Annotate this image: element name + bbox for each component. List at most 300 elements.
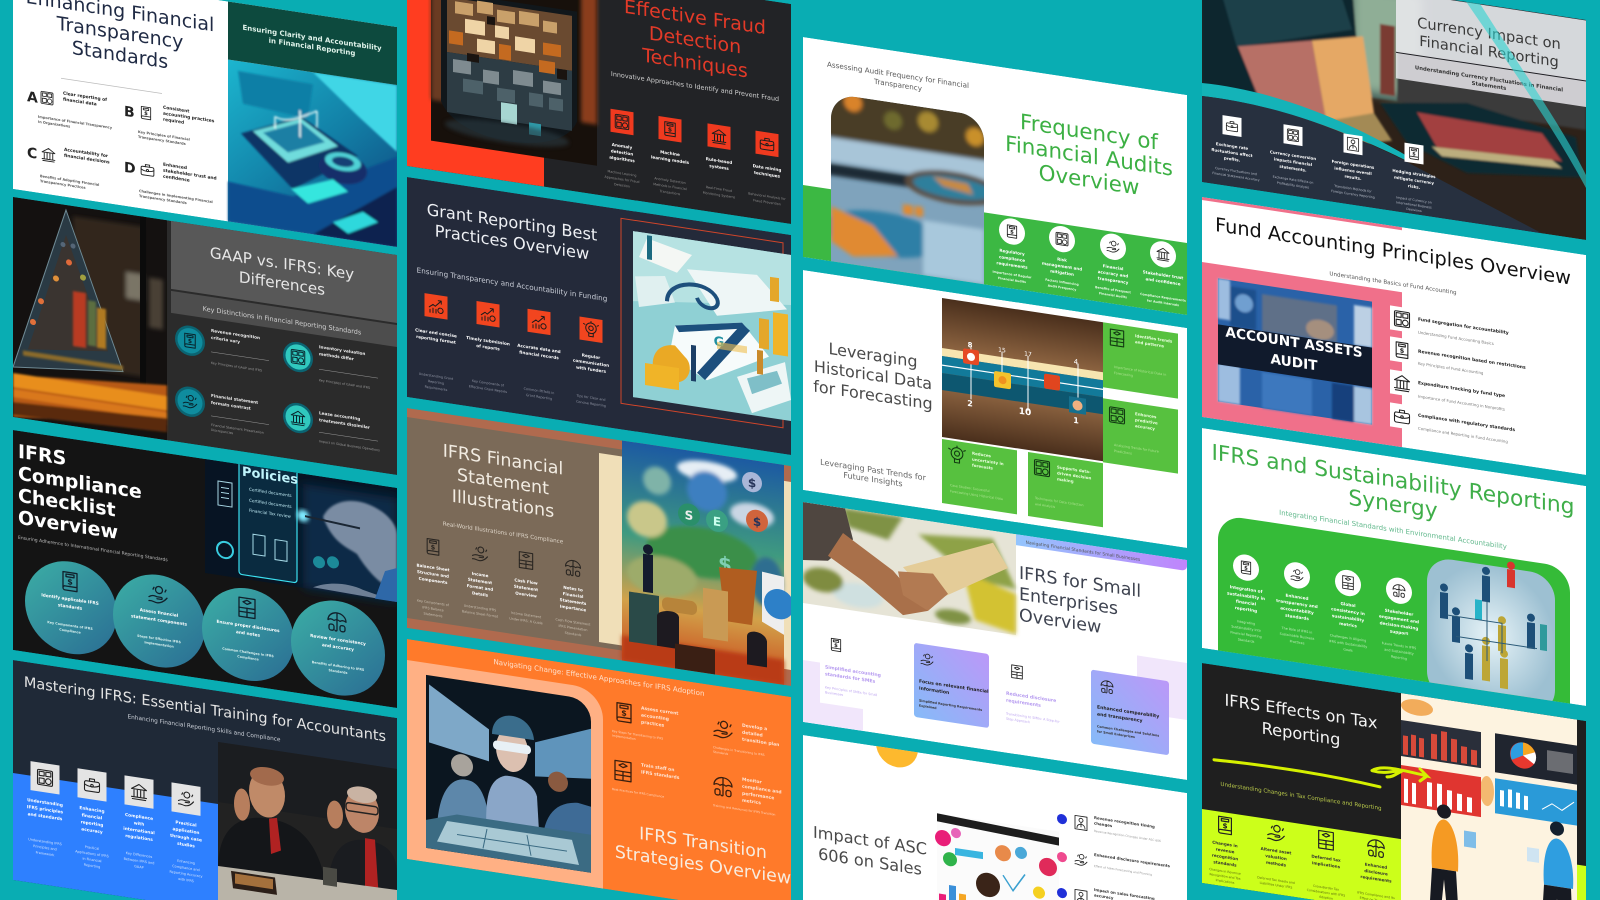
point: financial statement bbox=[175, 386, 269, 434]
title: Techniques bbox=[641, 43, 748, 82]
light panel bbox=[407, 660, 603, 889]
effect 1: Changes in Revenue bbox=[1209, 867, 1241, 876]
driver 2: management and bbox=[1042, 261, 1082, 272]
card 3: requirements bbox=[1006, 698, 1041, 709]
item C bbox=[28, 148, 110, 189]
item D: D bbox=[124, 160, 136, 177]
effect 4: Decisions bbox=[1406, 207, 1422, 213]
subtitle bar bbox=[171, 291, 397, 347]
item A: A bbox=[27, 89, 38, 107]
effect 1: recognition bbox=[1212, 853, 1238, 861]
practice 2: Effective Grant Reports bbox=[469, 384, 507, 394]
step: assess: accounting bbox=[641, 712, 669, 723]
effect 4: mitigate currency bbox=[1394, 175, 1434, 186]
column 4 bbox=[169, 782, 203, 885]
effect 4: Enhanced bbox=[1365, 862, 1387, 870]
item C: Benefits of Adopting Financial bbox=[40, 174, 99, 187]
step: plan: Standards bbox=[713, 750, 729, 756]
driver 3: transparency bbox=[1098, 276, 1129, 285]
illustration 1: IFRS Balance bbox=[422, 605, 444, 613]
pillar 2: accountability bbox=[1280, 605, 1314, 615]
item A: Importance of Financial Transparency bbox=[38, 115, 113, 130]
principle 2: Key Principles of Fund Accounting bbox=[1418, 361, 1484, 376]
step 3: Compliance bbox=[237, 654, 259, 662]
step: assess: Assess current bbox=[641, 705, 679, 717]
column 1: Principles and bbox=[33, 844, 57, 852]
technique 4: Data mining bbox=[753, 163, 781, 173]
blue band bbox=[13, 773, 218, 900]
effect 1 bbox=[1211, 113, 1260, 182]
column 4: Enhancing bbox=[177, 859, 195, 865]
image: painted finance scene bbox=[622, 440, 794, 686]
practice 3 bbox=[517, 307, 561, 402]
card 3 bbox=[1005, 664, 1061, 729]
title box: Understanding Currency Fluctuations in Financial bbox=[1415, 65, 1563, 94]
column 3: with bbox=[134, 820, 144, 828]
step 1 bbox=[25, 561, 115, 654]
effect 1: fluctuations affect bbox=[1211, 147, 1253, 158]
image: policies hologram: Certified documents bbox=[249, 498, 292, 509]
title: IFRS and Sustainability Reporting bbox=[1211, 441, 1575, 520]
image: painted finance scene: $ bbox=[718, 551, 732, 577]
technique 2 bbox=[651, 115, 690, 198]
pillar 4: engagement and bbox=[1379, 613, 1419, 624]
title: IFRS Effects on Tax bbox=[1225, 690, 1378, 733]
brown panel bbox=[407, 417, 622, 650]
effect 2: impacts financial bbox=[1274, 156, 1313, 167]
practice 2: of reports bbox=[476, 343, 500, 352]
item B: B bbox=[124, 104, 135, 121]
column 4: through case bbox=[170, 833, 202, 844]
illustration 2: Income bbox=[472, 571, 489, 578]
effect 1: Implications bbox=[1216, 878, 1235, 885]
card 1 bbox=[820, 629, 895, 714]
title: IFRS for Small bbox=[1019, 564, 1141, 602]
principle 3 bbox=[1390, 369, 1505, 412]
item A: in Organizations bbox=[38, 120, 70, 129]
pillar 4: Stakeholder bbox=[1385, 608, 1414, 617]
illustration 1: Balance Sheet bbox=[417, 562, 449, 572]
box: decision making: making bbox=[1057, 476, 1074, 484]
effect 2: Liabilities Under IFRS bbox=[1260, 881, 1292, 890]
practice 2: Timely submission bbox=[466, 335, 510, 347]
pillar 2 bbox=[1276, 559, 1318, 647]
practice 1: Understanding Grant bbox=[419, 372, 454, 381]
practice 1: reporting format bbox=[416, 334, 456, 345]
right lime edge bbox=[1577, 865, 1586, 900]
item B: Transparency Standards bbox=[138, 135, 186, 146]
step: assess bbox=[612, 701, 679, 748]
item C: Transparency Practices bbox=[40, 179, 86, 190]
pillar 3: IFRS with Sustainability bbox=[1329, 639, 1367, 649]
technique 1: algorithms bbox=[609, 155, 635, 163]
step 2: Steps for Effective IFRS bbox=[137, 634, 181, 644]
item D: Enhanced bbox=[163, 162, 187, 171]
point: inventory valuation bbox=[283, 339, 378, 391]
principle 4 bbox=[1390, 402, 1515, 445]
pillar 2: Sustainable Business bbox=[1280, 632, 1315, 641]
panel: GAAP vs. IFRS bbox=[13, 197, 397, 475]
practice 4: communication bbox=[573, 358, 609, 368]
item B: Consistent bbox=[163, 105, 189, 115]
item A: financial data bbox=[63, 97, 97, 108]
row 1: Revenue Recognition Changes Under ASC 606 bbox=[1094, 829, 1161, 843]
practice 1 bbox=[415, 292, 457, 394]
panel: Leveraging Historical Data bbox=[803, 270, 1187, 548]
effect 4: risks. bbox=[1408, 183, 1421, 190]
technique 1: Detection bbox=[614, 182, 630, 189]
practice 3: financial records bbox=[519, 349, 559, 360]
step 4 bbox=[291, 600, 385, 696]
effect 4: requirements bbox=[1360, 874, 1392, 884]
effect 1: Exchange rate bbox=[1216, 141, 1248, 151]
point: lease accounting: Lease accounting bbox=[319, 410, 360, 421]
point: financial statement: Financial statement bbox=[211, 393, 258, 405]
title: Grant Reporting Best bbox=[427, 200, 597, 245]
image: banknote and tablets bbox=[1202, 0, 1586, 191]
illustration 3: Income Statement bbox=[511, 611, 542, 619]
effect 4: disclosure bbox=[1364, 868, 1388, 877]
image: presenter at colourful board bbox=[935, 813, 1059, 900]
ribbon: diagonal bbox=[1464, 0, 1586, 188]
column 2: Practical bbox=[85, 845, 99, 851]
title: IFRS Transition bbox=[639, 824, 767, 863]
column 1: IFRS principles bbox=[27, 804, 63, 816]
subtitle: Ensuring Adherence to International Financial Reporting Standards bbox=[18, 535, 168, 563]
technique 4: Fraud Prevention bbox=[753, 198, 781, 206]
image: timeline on wood bbox=[942, 298, 1103, 461]
pillar 3: metrics bbox=[1339, 621, 1357, 629]
principle 1: Understanding Fund Accounting Basics bbox=[1418, 330, 1494, 346]
driver 4: and confidence bbox=[1146, 276, 1181, 287]
image: account assets audit: ACCOUNT ASSETS bbox=[1225, 325, 1363, 361]
illustration 3: Cash Flow bbox=[514, 577, 538, 586]
pillar 4: Future Trends in IFRS bbox=[1382, 641, 1416, 650]
title: Synergy bbox=[1348, 486, 1438, 524]
ribbon: lower curve bbox=[1202, 83, 1407, 161]
column 4: with IFRS bbox=[178, 877, 194, 883]
point: lease accounting: treatments dissimilar bbox=[319, 417, 371, 430]
practice 3: Grant Reporting bbox=[526, 393, 552, 401]
subtitle band bbox=[228, 1, 397, 85]
driver 1: requirements bbox=[996, 260, 1028, 270]
illustration 1: Statements bbox=[424, 612, 443, 618]
effect 3: Considerations with IFRS bbox=[1307, 888, 1345, 898]
image: timeline on wood: 4 bbox=[1074, 357, 1079, 367]
principle 3: Importance of Fund Accounting in Nonprofits bbox=[1418, 394, 1505, 412]
column 3: Compliance bbox=[125, 812, 153, 822]
box: uncertainty: forecasts bbox=[972, 463, 993, 471]
effect 2: Profitability Analysis bbox=[1277, 181, 1309, 190]
technique 1 bbox=[604, 108, 640, 190]
point: inventory valuation: Inventory valuation bbox=[319, 344, 365, 356]
technique 1: Machine Learning bbox=[607, 169, 637, 178]
panel: IFRS Compliance Checklist bbox=[13, 426, 397, 708]
column 2: financial bbox=[82, 812, 103, 822]
pillar 1: Integrating bbox=[1237, 619, 1255, 626]
step: assess: Implementation bbox=[612, 733, 636, 741]
effect 3: Deferred tax bbox=[1311, 854, 1341, 863]
item D bbox=[125, 162, 216, 204]
step: monitor: metrics bbox=[742, 798, 761, 806]
column 1: and standards bbox=[28, 811, 63, 823]
panel: Grant Reporting bbox=[407, 177, 791, 455]
effect 1: revenue bbox=[1216, 847, 1235, 854]
step 3: Ensure proper disclosures bbox=[216, 619, 280, 634]
column 1 bbox=[27, 761, 63, 859]
box: uncertainty: uncertainty in bbox=[972, 457, 1004, 466]
column 2: reporting bbox=[81, 819, 103, 829]
effect 3 bbox=[1307, 829, 1345, 900]
step 2: Assess financial bbox=[140, 607, 179, 619]
panel: Mastering IFRS bbox=[13, 660, 397, 900]
subtitle: Understanding Changes in Tax Compliance and Reporting bbox=[1220, 782, 1382, 812]
point: financial statement: formats contrast bbox=[211, 400, 251, 411]
item B bbox=[125, 106, 214, 145]
item B: required bbox=[163, 117, 184, 126]
step: plan: detailed bbox=[742, 730, 763, 739]
technique 3: Monitoring Systems bbox=[703, 191, 736, 200]
panel: Currency Impact bbox=[1202, 0, 1586, 240]
effect 3: influence overall bbox=[1334, 165, 1372, 176]
title: Statement bbox=[457, 466, 549, 499]
title: Overview bbox=[1039, 161, 1139, 201]
step: assess: practices bbox=[641, 719, 664, 729]
pillar 3: Global bbox=[1340, 601, 1356, 608]
card 2: information bbox=[919, 686, 949, 696]
title: Impact of ASC bbox=[813, 823, 927, 859]
panel: Fund Accounting Principles bbox=[1202, 197, 1586, 475]
column 3 bbox=[123, 775, 155, 871]
title: Transparency bbox=[56, 12, 183, 54]
panel: IFRS for Small Enterprises bbox=[803, 502, 1187, 780]
title: Overview bbox=[18, 506, 118, 544]
image: policies hologram: Policies bbox=[242, 465, 298, 488]
practice 1: Clear and concise bbox=[415, 327, 457, 339]
subtitle: Transparency bbox=[873, 77, 923, 93]
driver 3: Benefits of Frequent bbox=[1095, 285, 1131, 295]
step: monitor: performance bbox=[742, 791, 774, 801]
title box: Statements bbox=[1472, 81, 1506, 92]
practice 4: Tips for Clear and bbox=[576, 393, 605, 402]
column 2 bbox=[75, 768, 109, 870]
box: uncertainty: Case Studies: Successful bbox=[950, 483, 990, 493]
item D: stakeholder trust and bbox=[163, 168, 217, 182]
column 2: accuracy bbox=[81, 826, 103, 836]
effect 1: Currency Fluctuations and bbox=[1215, 166, 1257, 176]
pink strip bbox=[1202, 197, 1402, 230]
red block bbox=[407, 0, 544, 187]
principle 1: Fund segregation for accountability bbox=[1418, 317, 1509, 336]
illustration 4: IFRS Presentation bbox=[559, 624, 587, 632]
row 2: Effect of Sales Forecasting and Planning bbox=[1094, 864, 1152, 877]
card 3: Transitioning to SMEs: A Step-by- bbox=[1005, 712, 1061, 724]
column 3: regulations bbox=[125, 833, 153, 843]
title: Financial Audits bbox=[1005, 132, 1173, 182]
practice 1: Requirements bbox=[425, 385, 448, 392]
driver 2: Audit Frequency bbox=[1048, 283, 1076, 292]
image: teal isometric scales bbox=[228, 59, 397, 247]
lime band bbox=[1202, 809, 1586, 900]
pillar 1: Standards bbox=[1238, 637, 1255, 644]
title box bbox=[1396, 0, 1586, 107]
effect 3: results. bbox=[1344, 174, 1362, 181]
image: glass pyramid bbox=[13, 197, 167, 440]
principle 2: Revenue recognition based on restrictions bbox=[1418, 349, 1526, 371]
effect 2: valuation bbox=[1265, 853, 1287, 861]
item A: Clear reporting of bbox=[63, 91, 107, 103]
image: policies hologram bbox=[205, 455, 397, 602]
item D: Challenges in Implementing Financial bbox=[139, 189, 213, 204]
image: timeline on wood: 2 bbox=[967, 399, 973, 409]
item C: C bbox=[27, 145, 37, 163]
point: revenue recognition: criteria vary bbox=[211, 335, 240, 344]
driver 4: Stakeholder trust bbox=[1143, 269, 1183, 280]
box: accuracy: Predictions bbox=[1114, 449, 1132, 456]
pillar 4 bbox=[1379, 575, 1419, 663]
title bar: Differences bbox=[239, 268, 325, 299]
image: handshake over map bbox=[803, 502, 1016, 635]
pillar 2: transparency and bbox=[1276, 598, 1318, 609]
illustration 2: Details bbox=[472, 590, 489, 598]
box: accuracy: Enhances bbox=[1135, 411, 1157, 419]
pillar 2: Practices bbox=[1290, 639, 1305, 645]
pillar 1: Sustainability into bbox=[1231, 624, 1261, 633]
effect 3: Foreign Currency Reporting bbox=[1331, 189, 1375, 200]
row 2: Enhanced disclosure requirements bbox=[1094, 852, 1171, 869]
effect 4: IFRS Compliance and Its bbox=[1357, 890, 1395, 900]
principle 4: Compliance and Reporting in Fund Accounting bbox=[1418, 426, 1508, 444]
technique 2: Anomaly Detection bbox=[654, 176, 686, 185]
column 4: Compliance and bbox=[172, 864, 200, 872]
card 4: Common Challenges and Solutions bbox=[1097, 724, 1159, 738]
effect 3: Foreign operations bbox=[1332, 159, 1375, 170]
pillar 4: support bbox=[1390, 628, 1408, 636]
step: train: IFRS standards bbox=[641, 769, 680, 781]
title: Checklist bbox=[18, 484, 116, 521]
step 1: Key Components of IFRS bbox=[47, 620, 93, 631]
column 2: Reporting bbox=[84, 863, 100, 869]
technique 1: Anomaly bbox=[612, 142, 632, 150]
effect 1: Financial Statement Accuracy bbox=[1212, 171, 1260, 182]
title: Overview bbox=[1019, 606, 1101, 638]
brush stroke and arrow bbox=[1214, 738, 1427, 794]
effect 2: statements. bbox=[1279, 164, 1307, 173]
title bar bbox=[171, 221, 397, 323]
technique 4: Behavioral Analysis for bbox=[748, 192, 786, 201]
card 2: Focus on relevant financial bbox=[919, 679, 989, 695]
step 1: Compliance bbox=[59, 628, 81, 635]
driver 4: for Audit Intervals bbox=[1147, 298, 1179, 307]
image: magnifier on map bbox=[823, 84, 1001, 287]
step 1: Identify applicable IFRS bbox=[41, 592, 99, 607]
card 1: standards for SMEs bbox=[825, 671, 875, 685]
step 4: and accuracy bbox=[322, 642, 354, 653]
image: policies hologram: Financial Tax review bbox=[249, 508, 291, 519]
box: decision making: and Analysis bbox=[1035, 502, 1055, 509]
title: Standards bbox=[72, 36, 168, 73]
pillar 1: Integration of bbox=[1230, 584, 1263, 594]
technique 3: Real-Time Fraud bbox=[706, 185, 732, 193]
image: people network bbox=[1427, 549, 1555, 715]
practice 4: Concise Reporting bbox=[576, 400, 606, 408]
effect 2: Currency conversion bbox=[1270, 149, 1316, 161]
pillar 1: financial bbox=[1236, 599, 1257, 607]
step: monitor: Monitor bbox=[742, 777, 763, 786]
practice 4: Regular bbox=[582, 352, 601, 360]
panel: Impact of ASC 606 bbox=[803, 711, 1187, 900]
box: trends: Identifies trends bbox=[1135, 333, 1173, 344]
point: inventory valuation: Key Principles of GAAP and IFRS bbox=[319, 378, 370, 390]
subtitle: Integrating Financial Standards with Environmental Accountability bbox=[1279, 509, 1507, 551]
panel: IFRS Financial Statement Illustrations bbox=[407, 408, 794, 686]
frame and isometric image: G bbox=[714, 334, 724, 351]
practice 4 bbox=[573, 316, 609, 409]
effect 4 bbox=[1392, 141, 1436, 215]
yellow circle bbox=[876, 722, 918, 770]
subtitle: Future Insights bbox=[843, 471, 903, 489]
effect 1: standards bbox=[1213, 859, 1237, 868]
technique 2: Transactions bbox=[659, 189, 681, 196]
illustration 4: Cash Flow Statement bbox=[556, 617, 591, 627]
pill: subtitle bbox=[1016, 534, 1187, 571]
effect 2: methods bbox=[1266, 860, 1287, 868]
illustration 2: Understanding IFRS bbox=[464, 604, 496, 612]
pillar 3 bbox=[1329, 567, 1367, 655]
effect 3: implications bbox=[1312, 860, 1341, 869]
step: plan: transition plan bbox=[742, 737, 779, 748]
title: Leveraging bbox=[828, 339, 918, 371]
item D: confidence bbox=[163, 174, 190, 184]
card 4 bbox=[1091, 669, 1169, 755]
image: painted finance scene: $ bbox=[753, 514, 761, 529]
column 1: Framework bbox=[36, 850, 54, 857]
practice 2: Key Components of bbox=[472, 379, 505, 388]
frame and isometric image bbox=[621, 218, 791, 429]
practice 2 bbox=[466, 299, 510, 395]
effect 1: profits. bbox=[1224, 155, 1241, 163]
cream strip right bbox=[784, 481, 791, 670]
step 4: Review for consistency bbox=[310, 633, 366, 647]
item D: Transparency Standards bbox=[139, 194, 187, 205]
title: Enterprises bbox=[1019, 585, 1118, 620]
technique 2: learning models bbox=[651, 154, 690, 165]
subtitle: Ensuring Transparency and Accountability in Funding bbox=[417, 266, 607, 303]
illustration 1: Components bbox=[419, 576, 448, 585]
effect 2 bbox=[1270, 122, 1316, 191]
item C: Accountability for bbox=[64, 147, 109, 159]
image: painted finance scene: E bbox=[713, 514, 721, 529]
step 2 bbox=[113, 574, 204, 668]
illustration 4: Importance bbox=[560, 604, 586, 613]
step: monitor bbox=[712, 772, 782, 818]
step 4: Standards bbox=[329, 668, 348, 675]
box: trends: Forecasting bbox=[1114, 371, 1133, 378]
driver 1: compliance bbox=[999, 254, 1025, 263]
box: uncertainty: Forecasting Using Historical Data bbox=[950, 489, 1003, 501]
technique 3 bbox=[703, 123, 736, 200]
title: Fund Accounting Principles Overview bbox=[1215, 213, 1571, 290]
technique 4 bbox=[748, 130, 786, 207]
illustration 2: Format and bbox=[467, 583, 493, 592]
driver 4: Compliance Requirements bbox=[1140, 292, 1186, 303]
column 3: GAAP bbox=[134, 864, 144, 870]
technique 1: detection bbox=[611, 148, 633, 157]
step 2: statement components bbox=[131, 613, 187, 628]
effect 3 bbox=[1331, 132, 1375, 200]
card 2: Explained bbox=[919, 704, 937, 710]
illustration 2: Balance Sheet Format bbox=[462, 609, 499, 619]
